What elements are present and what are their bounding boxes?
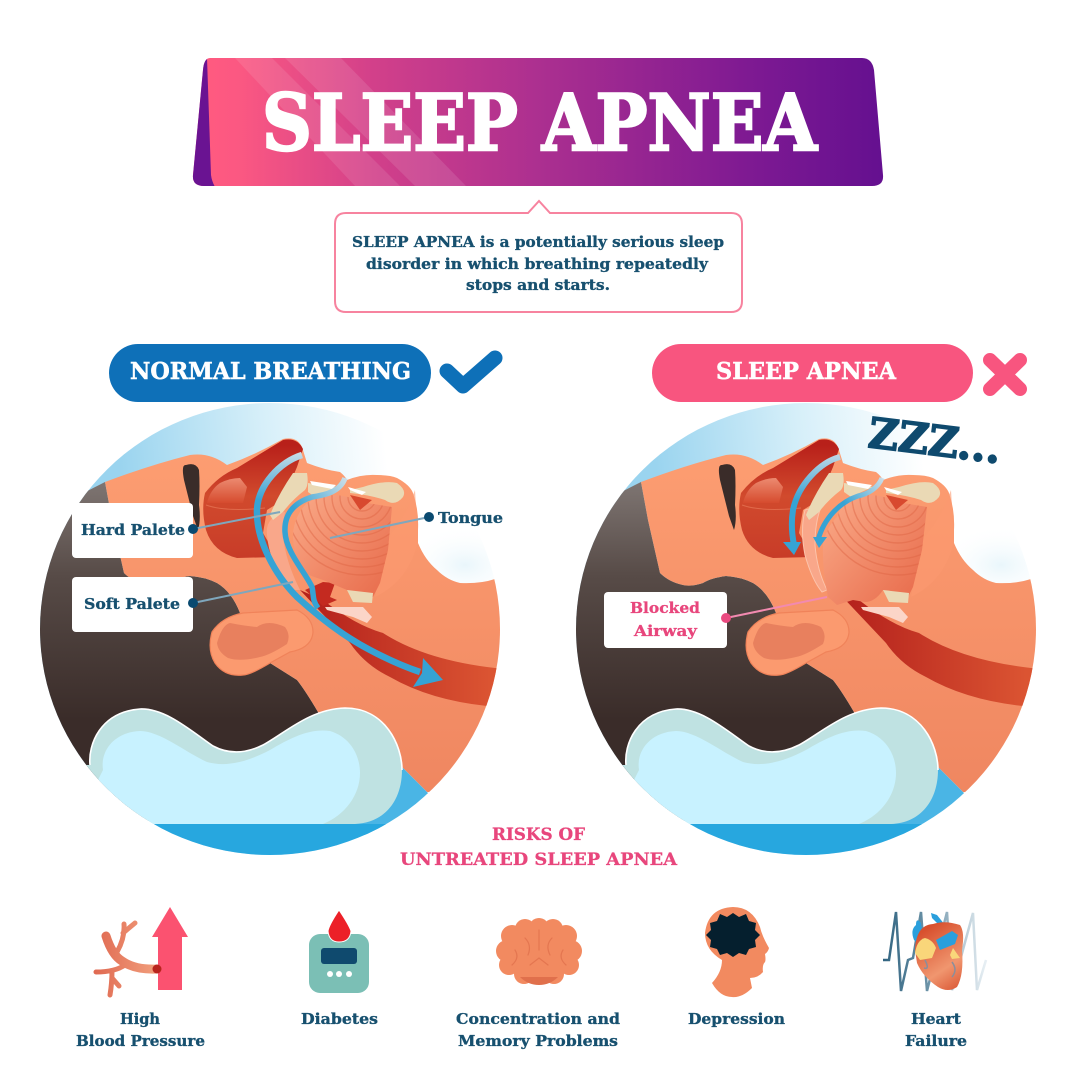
- tongue blocking airway: [823, 495, 927, 605]
- definition text: stops and starts.: [466, 276, 610, 294]
- risk: high blood pressure: High: [120, 1010, 160, 1028]
- label: blocked airway: [604, 592, 827, 648]
- label: blocked airway: Airway: [633, 622, 698, 640]
- definition text: [352, 233, 724, 294]
- title banner: [188, 58, 883, 190]
- risk: heart failure: Heart: [911, 1010, 961, 1028]
- icon: blood vessel: [96, 923, 157, 995]
- label: tongue: Tongue: [438, 509, 503, 527]
- panel: sleep apnea anatomy: [576, 403, 1036, 855]
- dark red pocket behind tongue: [305, 582, 337, 606]
- label: blocked airway: Blocked: [630, 599, 701, 617]
- label: hard palate: Hard Palete: [81, 521, 185, 539]
- definition callout: [335, 201, 742, 312]
- label: soft palate: Soft Palete: [84, 595, 180, 613]
- risks heading: UNTREATED SLEEP APNEA: [400, 850, 678, 870]
- risk: concentration and memory problems: [456, 918, 621, 1050]
- tongue: [293, 495, 392, 597]
- soft palate tissue collapsed: [802, 505, 827, 592]
- icon: head with dark cloud: [705, 907, 769, 997]
- icon: glucose meter: [309, 910, 369, 993]
- risk: heart failure: Failure: [905, 1032, 967, 1050]
- heading pill: normal breathing: [109, 344, 431, 402]
- definition text: SLEEP APNEA is a potentially serious sleep: [352, 233, 724, 251]
- definition text: disorder in which breathing repeatedly: [366, 255, 709, 273]
- heading pill: normal breathing: NORMAL BREATHING: [130, 358, 411, 385]
- icon: check mark: [447, 358, 495, 386]
- soft palate tissue: [267, 512, 300, 590]
- label: soft palate: [72, 577, 293, 632]
- risk: depression: Depression: [688, 1010, 785, 1028]
- icon: brain: [496, 918, 582, 985]
- risk: diabetes: Diabetes: [301, 1010, 378, 1028]
- title text: SLEEP APNEA: [262, 78, 818, 169]
- airflow arrow: [257, 455, 443, 687]
- snoring text: ZZZ...: [866, 408, 1004, 473]
- risk: heart failure: [883, 912, 986, 1050]
- risk: high blood pressure: Blood Pressure: [76, 1032, 205, 1050]
- risk: depression: [688, 907, 785, 1028]
- icon: cross mark: [990, 360, 1020, 389]
- risks heading: [400, 825, 678, 870]
- risks heading: RISKS OF: [492, 825, 585, 845]
- label: tongue: [330, 509, 503, 538]
- airflow arrows stopped: [783, 457, 882, 555]
- risk: high blood pressure: [76, 907, 205, 1050]
- risk: concentration and memory problems: Memory Problems: [458, 1032, 618, 1050]
- heading pill: sleep apnea: SLEEP APNEA: [716, 358, 897, 385]
- risk: diabetes: [301, 910, 378, 1028]
- label: hard palate: [72, 503, 280, 558]
- icon: heart with ECG line: [883, 912, 986, 991]
- panel: normal breathing anatomy: [40, 403, 502, 855]
- risk: concentration and memory problems: Concentration and: [456, 1010, 621, 1028]
- icon: red up arrow: [152, 907, 188, 990]
- heading pill: sleep apnea: [652, 344, 973, 402]
